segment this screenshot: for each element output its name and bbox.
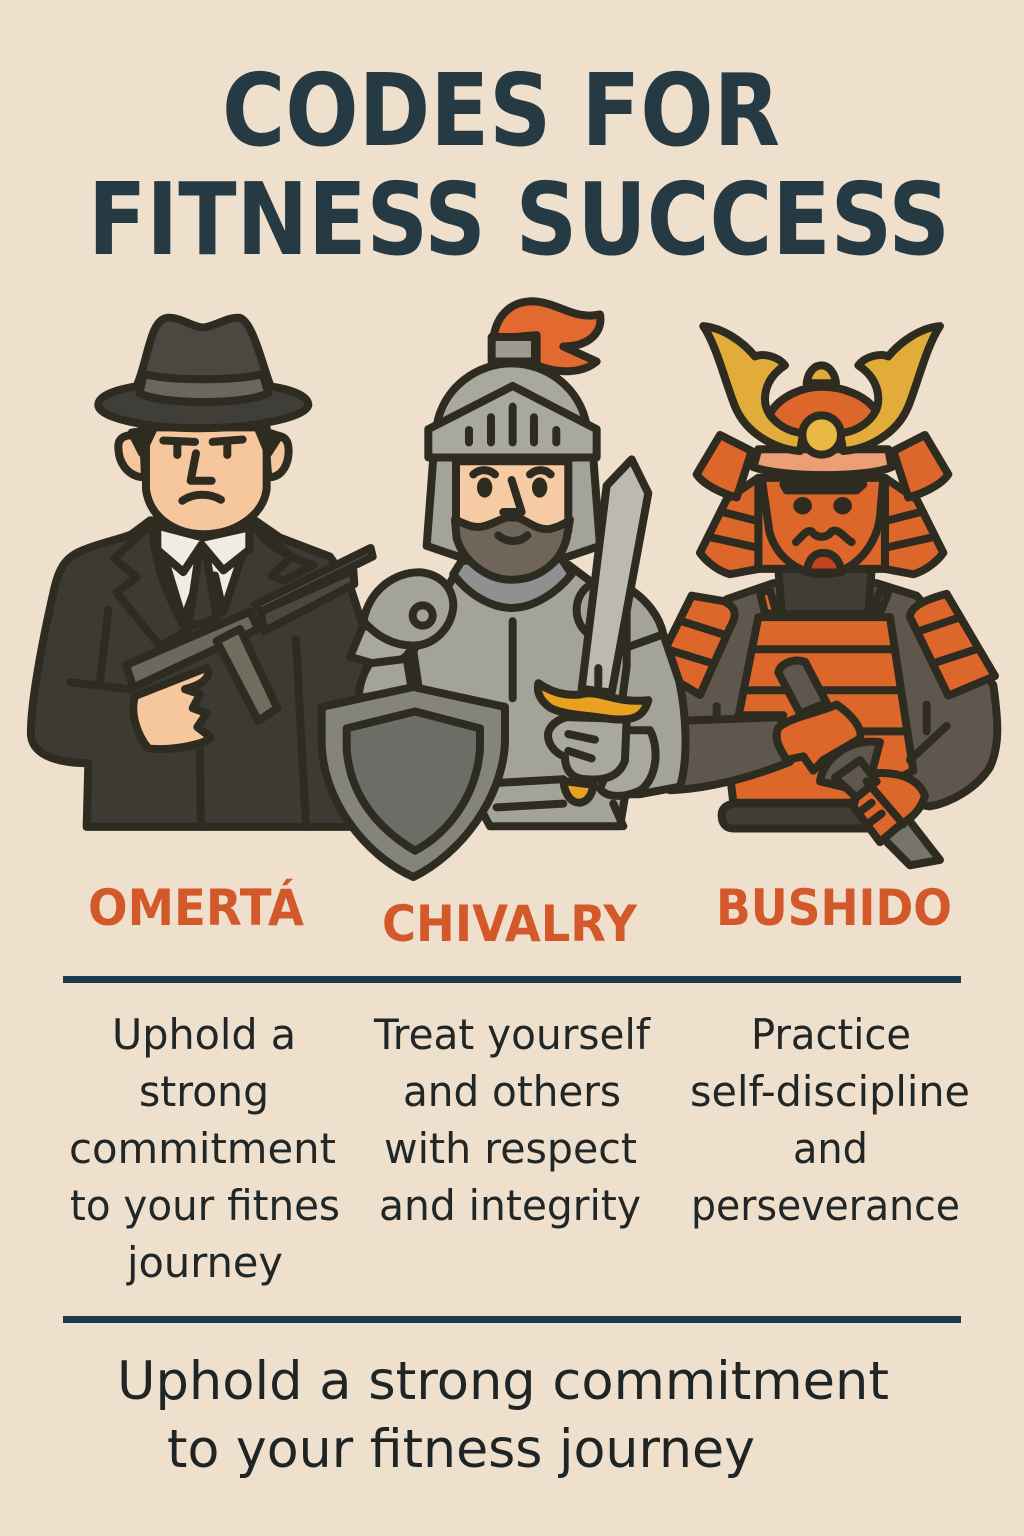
- sword fuller: [594, 668, 602, 685]
- text: bushido description: perseverance: [691, 1181, 960, 1230]
- helmet knob: [807, 365, 836, 383]
- gun body: [126, 612, 258, 687]
- hat crown: [137, 318, 271, 400]
- text: omerta description: journey: [126, 1238, 283, 1287]
- right arm: [610, 587, 686, 794]
- horn left: [703, 326, 803, 451]
- neck guard right: [885, 478, 943, 574]
- brow: [783, 484, 863, 490]
- gorget: [453, 559, 572, 608]
- mustache: [796, 531, 852, 542]
- head: [146, 427, 267, 534]
- torso: [413, 565, 653, 826]
- finger lines: [860, 781, 903, 824]
- beard: [455, 517, 570, 580]
- tie: [188, 546, 217, 627]
- sword crossguard: [538, 683, 648, 720]
- hat brim: [98, 386, 308, 428]
- face: [762, 478, 883, 574]
- katana blade: [883, 817, 940, 865]
- helmet band: [753, 449, 892, 475]
- glove fingers: [568, 734, 595, 758]
- text: chivalry description: and integrity: [379, 1181, 641, 1230]
- shoulder left: [665, 596, 735, 695]
- skirt: [722, 804, 890, 829]
- sword guard: [820, 742, 880, 789]
- helmet dome: [770, 387, 877, 433]
- face lines: [163, 439, 243, 501]
- figure: knight with shield and sword: [322, 301, 686, 877]
- arm seam: [497, 587, 663, 826]
- shield inner: [347, 711, 480, 851]
- figure: mobster with tommy gun: [31, 318, 373, 827]
- chin beard: [807, 553, 842, 572]
- eyes: [481, 482, 488, 494]
- samurai arm: [670, 717, 790, 790]
- text: omerta description: to your fitnes: [70, 1181, 340, 1230]
- guard lines: [708, 512, 935, 547]
- closing statement: Uphold a strong commitment: [117, 1351, 889, 1412]
- text: omerta description: commitment: [69, 1124, 336, 1173]
- pauldron: [363, 572, 453, 646]
- closing statement: [117, 1351, 889, 1480]
- visor: [428, 386, 597, 457]
- text: chivalry description: [373, 1010, 651, 1230]
- pauldron rivet: [413, 605, 433, 626]
- armor underlayer: [670, 583, 997, 806]
- eyes: [797, 501, 808, 510]
- shirt: [155, 527, 252, 620]
- shoulder lines: [667, 617, 978, 760]
- hand: [133, 668, 211, 749]
- gauntlet cuff: [600, 730, 656, 796]
- shield outer: [322, 687, 505, 877]
- text: omerta description: strong: [139, 1067, 269, 1116]
- gun magazine: [217, 629, 277, 721]
- text: omerta description: Uphold a: [112, 1010, 296, 1059]
- straps: [760, 590, 888, 614]
- hair: [132, 429, 279, 453]
- helmet stem: [492, 337, 535, 361]
- visor slits: [469, 407, 556, 442]
- text: chivalry description: and others: [403, 1067, 621, 1116]
- text: bushido description: Practice: [751, 1010, 911, 1059]
- helmet dome: [437, 363, 587, 425]
- katana hilt upper: [778, 661, 827, 714]
- jacket: [31, 520, 367, 827]
- gun barrel: [255, 548, 373, 612]
- jacket seams: [70, 610, 306, 827]
- hood behind face: [758, 478, 885, 569]
- ears: [118, 435, 289, 477]
- cheek guards: [427, 457, 600, 557]
- face: [456, 461, 568, 531]
- title: CODES FOR: [222, 52, 780, 169]
- fist lower: [853, 773, 925, 842]
- fist upper: [777, 705, 860, 771]
- hilt lower: [835, 760, 877, 797]
- pauldron lower: [350, 625, 413, 665]
- gauntlet hand: [548, 717, 627, 780]
- closing statement: to your fitness journey: [167, 1419, 755, 1480]
- text: omerta description: [69, 1010, 340, 1287]
- neck guard left: [700, 478, 758, 574]
- collar: [157, 526, 249, 572]
- plume: [493, 301, 600, 371]
- label: bushido: BUSHIDO: [716, 879, 952, 937]
- chest stripes: [738, 649, 907, 731]
- crest disc: [802, 415, 841, 455]
- figure: samurai in armor: [665, 326, 997, 865]
- text: bushido description: [690, 1010, 970, 1230]
- chest plate: [730, 617, 913, 803]
- shoulder right: [910, 594, 995, 696]
- text: bushido description: and: [793, 1124, 868, 1173]
- upper arm: [358, 659, 412, 698]
- label: omerta: OMERTÁ: [88, 878, 304, 937]
- title: [88, 52, 950, 278]
- text: bushido description: self-discipline: [690, 1067, 970, 1116]
- sword pommel: [563, 781, 593, 803]
- text: chivalry description: with respect: [384, 1124, 637, 1173]
- hat band: [139, 374, 268, 402]
- lapels: [114, 524, 187, 646]
- sword blade: [582, 459, 648, 693]
- horn right: [840, 326, 940, 451]
- text: chivalry description: Treat yourself: [373, 1010, 651, 1059]
- neck: [778, 569, 872, 614]
- side wings: [697, 435, 752, 497]
- label: chivalry: CHIVALRY: [382, 895, 638, 953]
- face details: [473, 470, 551, 541]
